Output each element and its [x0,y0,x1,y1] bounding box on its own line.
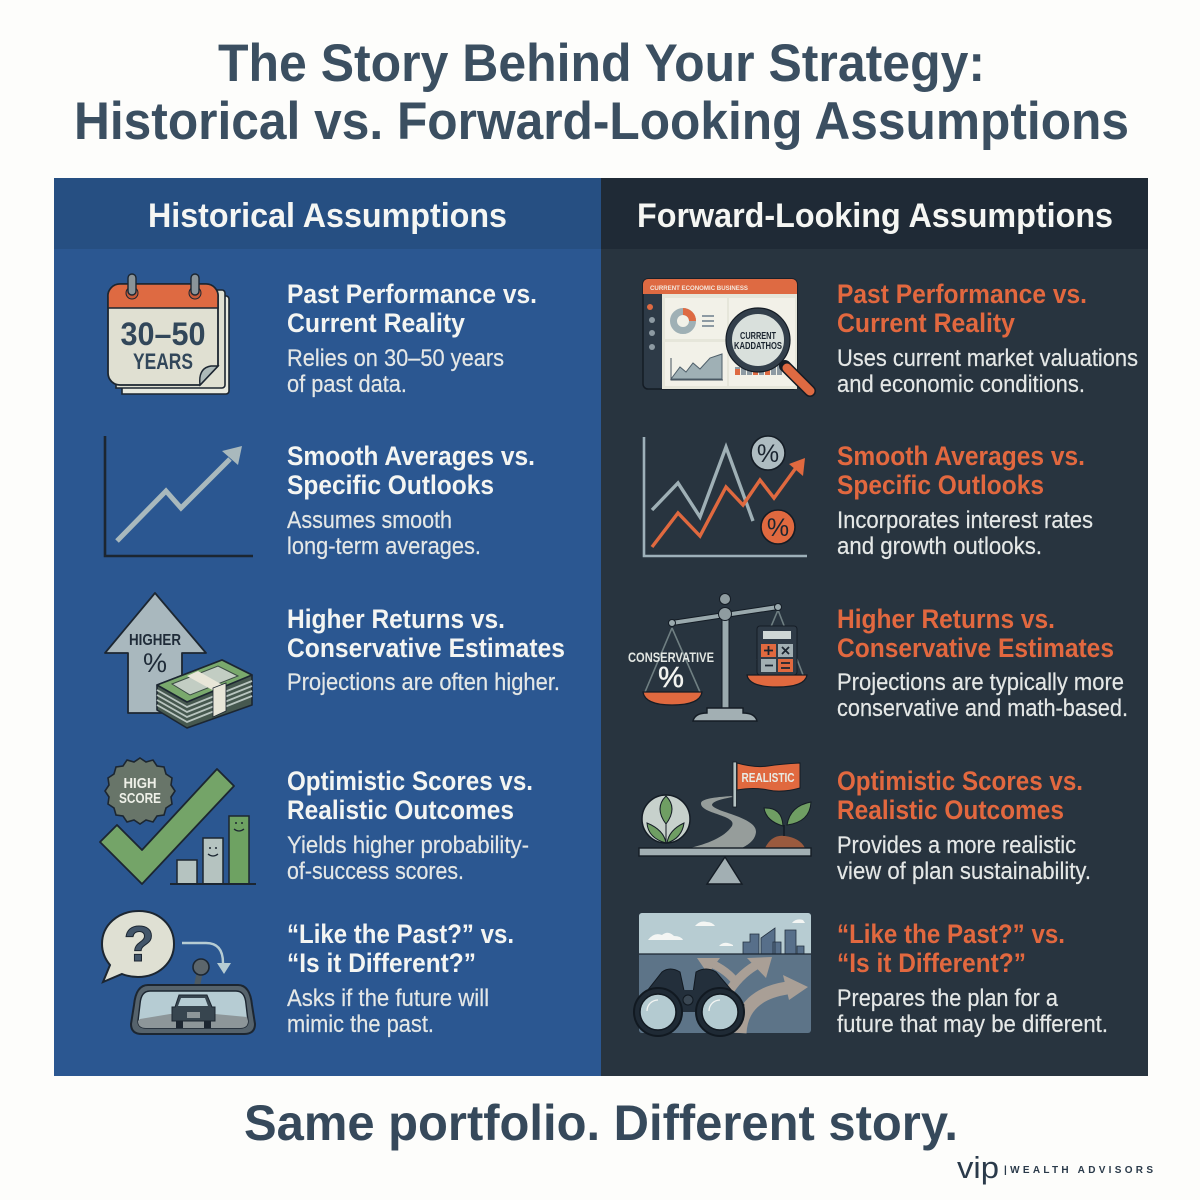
text block: higher returns, historical: Projections are often higher. [287,669,560,696]
text block: past performance, forward-looking: Past Performance vs. [837,279,1087,309]
text block: like the past, forward-looking: future that may be different. [837,1011,1108,1038]
text block: optimistic scores, historical: of-success scores. [287,858,464,885]
tagline: Same portfolio. Different story. [244,1095,958,1151]
text block: higher returns, forward-looking: Conservative Estimates [837,633,1114,663]
icon: balance scale with calculator: % [658,662,684,694]
text block: like the past, historical [287,919,514,1038]
icon: binoculars viewing diverging paths [634,913,811,1036]
text block: optimistic scores, historical [287,766,533,885]
title: Historical vs. Forward-Looking Assumptions [74,92,1129,151]
icon: dashboard with magnifier [643,279,810,391]
icon: volatile line chart with percent badges: % [757,440,779,468]
text block: optimistic scores, historical: Optimistic Scores vs. [287,766,533,796]
text block: optimistic scores, forward-looking: Realistic Outcomes [837,795,1064,825]
icon: volatile line chart with percent badges: % [767,514,789,542]
text block: smooth averages, forward-looking: Specific Outlooks [837,470,1044,500]
text block: higher returns, forward-looking: Projections are typically more [837,669,1124,696]
text block: past performance, forward-looking: Current Reality [837,308,1015,338]
icon: balance scale with calculator: CONSERVATIVE [628,649,714,665]
text block: higher returns, historical [287,604,565,696]
text block: smooth averages, forward-looking: and growth outlooks. [837,533,1042,560]
icon: calendar 30-50 years: YEARS [133,349,193,374]
icon: realistic flag on balanced path [639,762,811,884]
panel header: forward-looking [601,178,1148,249]
text block: past performance, historical: of past data. [287,371,407,398]
text block: higher returns, historical: Higher Returns vs. [287,604,505,634]
title: The Story Behind Your Strategy: [218,34,985,93]
icon: realistic flag on balanced path: REALISTIC [742,770,795,785]
text block: like the past, historical: “Is it Different?” [287,948,476,978]
icon: balance scale with calculator [628,594,807,721]
icon: dashboard with magnifier: CURRENT ECONOMIC BUSINESS [650,286,748,292]
icon: dashboard with magnifier: KADDATHOS [734,341,782,352]
icon: question bubble and rear-view mirror [102,911,255,1034]
text block: like the past, historical: mimic the past. [287,1011,434,1038]
icon: high score checkmark and bars: SCORE [119,791,161,807]
panel header: historical [54,178,601,249]
icon: high score checkmark and bars [100,758,256,884]
text block: smooth averages, forward-looking: Incorporates interest rates [837,507,1093,534]
icon: higher arrow with cash stack: % [143,648,167,678]
text block: smooth averages, historical [287,441,535,560]
text block: like the past, forward-looking: “Like the Past?” vs. [837,919,1065,949]
icon: calendar 30-50 years: 30–50 [120,316,206,352]
text block: like the past, historical: “Like the Past?” vs. [287,919,514,949]
text block: like the past, forward-looking: “Is it Different?” [837,948,1026,978]
text block: higher returns, historical: Conservative Estimates [287,633,565,663]
logo: vip wealth advisors: |WEALTH ADVISORS [1004,1165,1153,1176]
text block: optimistic scores, forward-looking: view of plan sustainability. [837,858,1091,885]
text block: past performance, historical [287,279,537,398]
text block: past performance, forward-looking: Uses current market valuations [837,345,1138,372]
text block: higher returns, forward-looking: Higher Returns vs. [837,604,1055,634]
title [74,34,1129,151]
icon: higher arrow with cash stack: HIGHER [129,632,181,649]
text block: higher returns, forward-looking [837,604,1128,722]
panel header: forward-looking: Forward-Looking Assumptions [637,197,1113,235]
text block: higher returns, forward-looking: conservative and math-based. [837,695,1128,722]
text block: past performance, historical: Current Reality [287,308,465,338]
text block: smooth averages, historical: long-term averages. [287,533,481,560]
icon: volatile line chart with percent badges [644,436,807,556]
icon: higher arrow with cash stack [105,593,252,728]
text block: past performance, historical: Past Performance vs. [287,279,537,309]
text block: optimistic scores, forward-looking [837,766,1091,885]
text block: like the past, forward-looking [837,919,1108,1038]
icon: calendar 30-50 years [108,274,229,394]
logo: vip wealth advisors [957,1150,1153,1185]
text block: optimistic scores, forward-looking: Optimistic Scores vs. [837,766,1083,796]
panel: forward-looking assumptions [601,178,1148,1076]
text block: past performance, forward-looking: and economic conditions. [837,371,1085,398]
text block: past performance, forward-looking [837,279,1138,398]
icon: high score checkmark and bars: HIGH [124,776,156,792]
text block: smooth averages, historical: Smooth Averages vs. [287,441,535,471]
panel header: historical: Historical Assumptions [148,197,507,235]
text block: smooth averages, historical: Assumes smooth [287,507,452,534]
icon: dashboard with magnifier: CURRENT [740,331,776,342]
icon: question bubble and rear-view mirror: ? [124,916,154,972]
text block: optimistic scores, historical: Realistic Outcomes [287,795,514,825]
text block: past performance, historical: Relies on 30–50 years [287,345,504,372]
text block: smooth averages, historical: Specific Outlooks [287,470,494,500]
panel: historical assumptions [54,178,601,1076]
text block: smooth averages, forward-looking [837,441,1093,560]
text block: like the past, historical: Asks if the future will [287,985,489,1012]
text block: smooth averages, forward-looking: Smooth Averages vs. [837,441,1085,471]
text block: optimistic scores, historical: Yields higher probability- [287,832,529,859]
text block: optimistic scores, forward-looking: Provides a more realistic [837,832,1076,859]
icon: smooth rising line chart [105,436,253,556]
text block: like the past, forward-looking: Prepares the plan for a [837,985,1058,1012]
logo: vip wealth advisors: vip [957,1150,999,1185]
